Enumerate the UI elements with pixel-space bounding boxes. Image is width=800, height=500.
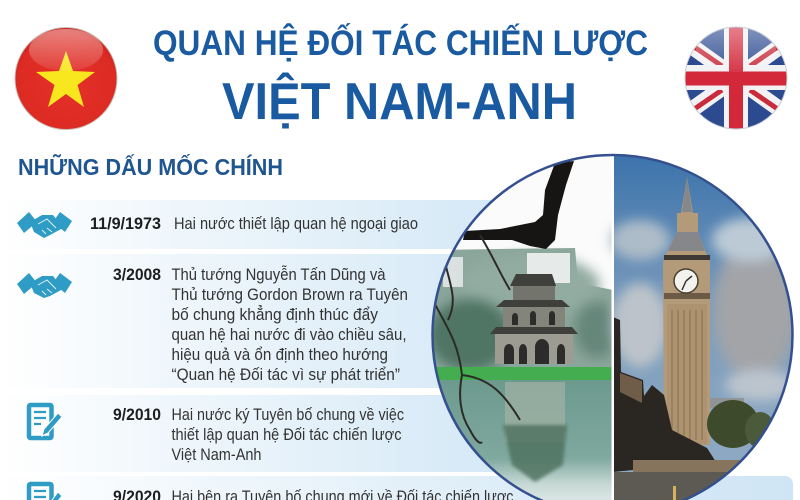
right photo: Big Ben and Westminster <box>610 150 800 500</box>
clock face <box>674 269 698 293</box>
timeline band: 3/2008 <box>0 254 620 388</box>
photo circle: Hanoi and London <box>428 150 800 500</box>
milestone: 3/2008: quan hệ hai nước đi vào chiều sâu, <box>172 326 406 344</box>
milestone: 9/2010: Hai nước ký Tuyên bố chung về việc <box>172 406 404 424</box>
title <box>153 23 648 131</box>
milestone: 11/9/1973: Hai nước thiết lập quan hệ ngoại giao <box>174 215 418 233</box>
title: VIỆT NAM-ANH <box>222 72 577 131</box>
timeline band: 9/2020 <box>0 476 793 500</box>
title: QUAN HỆ ĐỐI TÁC CHIẾN LƯỢC <box>153 23 648 63</box>
icon: Vietnam flag <box>15 28 117 130</box>
milestone: 3/2008 <box>113 265 408 384</box>
timeline band: 11/9/1973 <box>0 200 620 249</box>
milestone: 3/2008: hiệu quả và ổn định theo hướng <box>172 346 388 364</box>
heading: main milestones: NHỮNG DẤU MỐC CHÍNH <box>18 153 283 180</box>
milestone: 3/2008: Thủ tướng Gordon Brown ra Tuyên <box>172 286 408 304</box>
icon: handshake 1973 <box>17 212 72 238</box>
milestone: 9/2010 <box>113 405 404 464</box>
left photo: Hoan Kiem lake and Turtle Tower <box>428 150 619 500</box>
icon: handshake 2008 <box>17 273 72 298</box>
icon: document and pen 2010 <box>29 405 62 438</box>
milestone: 3/2008: 3/2008 <box>113 265 161 284</box>
milestone: 11/9/1973 <box>90 214 418 233</box>
milestone: 3/2008: Thủ tướng Nguyễn Tấn Dũng và <box>172 265 386 284</box>
icon: document and pen 2020 <box>29 484 62 500</box>
milestone: 9/2010: thiết lập quan hệ Đối tác chiến lược <box>172 426 402 444</box>
milestone: 3/2008: “Quan hệ Đối tác vì sự phát triển” <box>172 366 400 384</box>
milestone: 11/9/1973: 11/9/1973 <box>90 214 161 233</box>
milestone: 3/2008: bố chung khẳng định thúc đẩy <box>172 305 379 324</box>
milestone: 9/2010: Việt Nam-Anh <box>172 446 262 464</box>
icon: United Kingdom flag <box>680 26 792 129</box>
timeline band: 9/2010 <box>0 395 620 472</box>
milestone: 9/2010: 9/2010 <box>113 405 161 424</box>
